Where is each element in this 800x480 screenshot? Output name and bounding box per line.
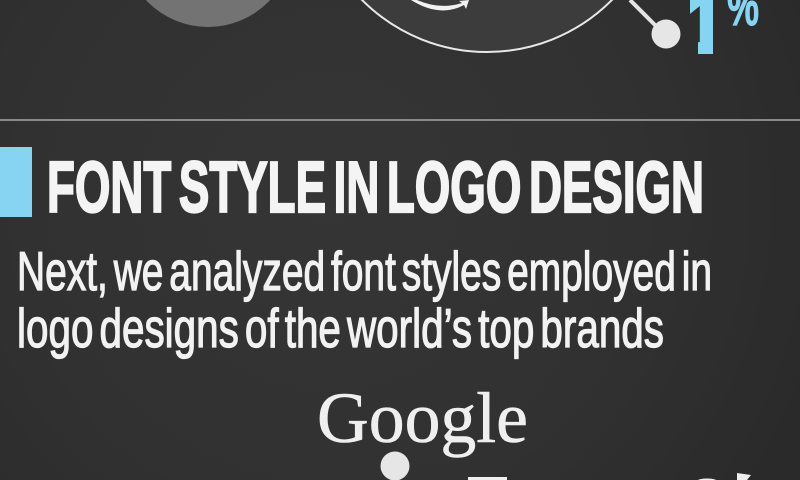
grey circle chart fragment	[123, 0, 293, 27]
connector line with dot	[630, 0, 680, 48]
icon: Amazon smile arrow	[411, 0, 469, 10]
percentage label	[690, 0, 758, 54]
intro text	[17, 240, 712, 359]
cropped logo fragments	[468, 473, 751, 480]
divider	[0, 119, 800, 121]
chart node dot	[380, 452, 410, 480]
large outlined circle with logo	[311, 0, 663, 52]
heading accent block	[0, 147, 32, 217]
logo: Google: Google	[317, 378, 528, 458]
